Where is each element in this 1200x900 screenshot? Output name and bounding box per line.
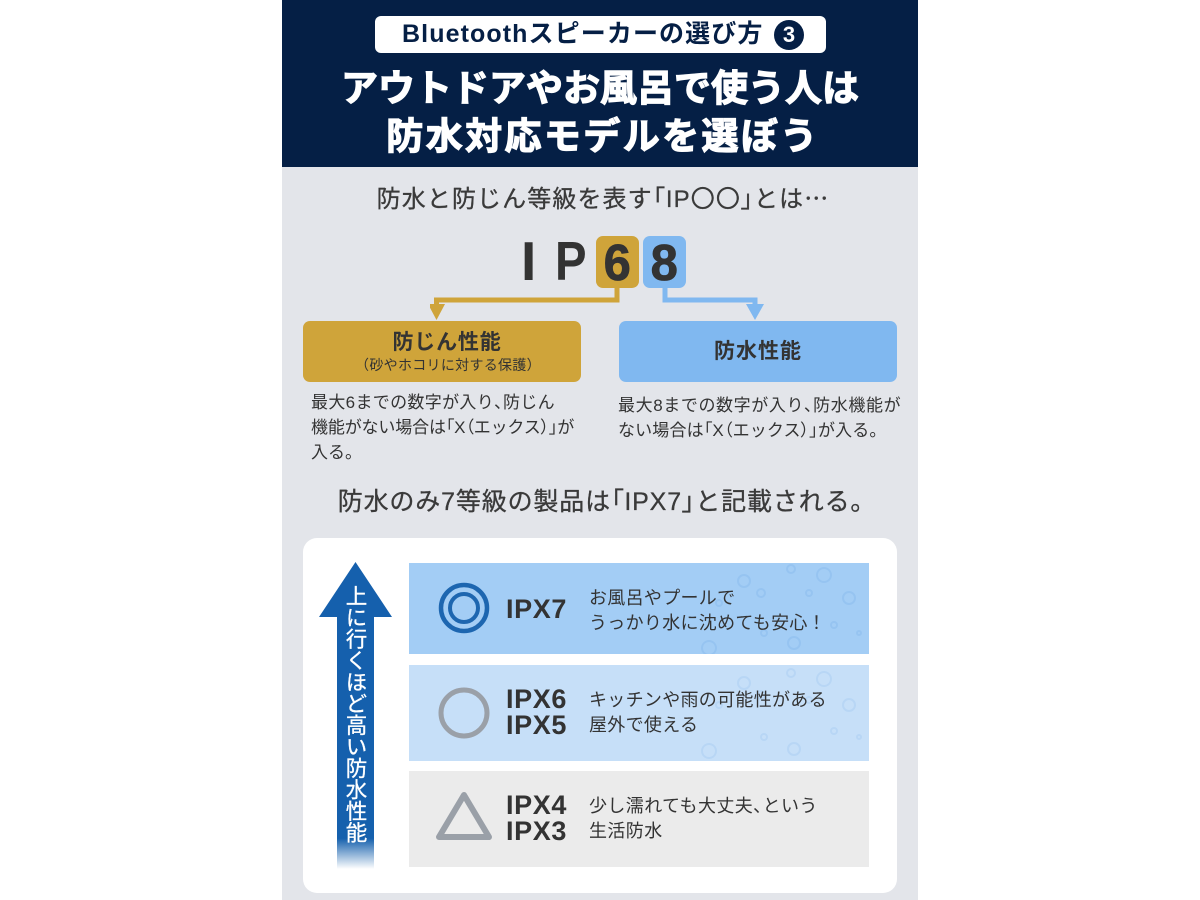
ratings IPX6 IPX5: IPX5	[506, 710, 567, 740]
page background panel	[282, 0, 918, 900]
ratings IPX6 IPX5	[506, 684, 567, 740]
note text: 防水のみ7等級の製品は「IPX7」と記載される。	[338, 488, 876, 516]
letter P: P	[555, 230, 587, 292]
water heading: 防水性能	[714, 340, 802, 363]
ratings IPX4 IPX3: IPX3	[506, 816, 567, 846]
row: IPX7	[409, 563, 869, 654]
title line 2: 防水対応モデルを選ぼう	[386, 116, 820, 157]
dust description: 最大6までの数字が入り、防じん	[311, 393, 555, 412]
IPX7 description: うっかり水に沈めても安心 ！	[589, 613, 821, 633]
arrow label: 上に行くほど高い防水性能	[343, 585, 367, 843]
section heading: 防水と防じん等級を表す「IP〇〇」とは…	[377, 179, 829, 214]
IPX6 IPX5 description: 屋外で使える	[589, 715, 698, 735]
water bubbles	[701, 564, 862, 654]
ratings IPX6 IPX5: IPX6	[506, 684, 567, 714]
digit 8 box: 8	[651, 234, 678, 291]
dust description: 入る。	[311, 443, 362, 462]
IPX4 IPX3 description: 少し濡れても大丈夫、という	[589, 796, 818, 816]
number badge 3	[774, 20, 804, 50]
IPX4 IPX3 description	[589, 796, 818, 841]
water bubbles	[701, 668, 862, 759]
digit 6 box	[596, 236, 639, 288]
arrow: higher is more waterproof	[319, 562, 392, 868]
panel: water resistance levels card	[303, 538, 897, 893]
ratings IPX4 IPX3	[506, 790, 567, 846]
icon: circle	[438, 688, 490, 738]
panel: water performance	[619, 321, 897, 382]
dust subheading: （砂やホコリに対する保護）	[355, 357, 541, 373]
IP68 diagram	[430, 230, 764, 320]
digit 6 box: 6	[604, 234, 631, 291]
dust description: 機能がない場合は「X（エックス）」が	[311, 418, 574, 437]
IPX7 description: お風呂やプールで	[589, 588, 735, 608]
connector arrows	[430, 288, 764, 320]
pill text: Bluetoothスピーカーの選び方	[402, 20, 763, 48]
letter I: I	[521, 230, 536, 292]
icon: double circle	[438, 582, 490, 634]
IPX4 IPX3 description: 生活防水	[589, 821, 663, 841]
dust description	[311, 393, 574, 462]
title line 1: アウトドアやお風呂で使う人は	[341, 68, 859, 109]
main title	[341, 68, 859, 157]
header pill label	[375, 16, 826, 53]
rating IPX7: IPX7	[506, 594, 567, 624]
dust heading: 防じん性能	[392, 331, 502, 354]
water description: ない場合は「X（エックス）」が入る。	[618, 421, 887, 440]
panel: dust performance	[303, 321, 581, 382]
water description	[618, 396, 901, 440]
row: IPX4 IPX3	[409, 771, 869, 867]
water description: 最大8までの数字が入り、防水機能が	[618, 396, 901, 415]
row: IPX6 IPX5	[409, 665, 869, 761]
digit 8 box	[643, 236, 686, 288]
header band	[282, 0, 918, 167]
ratings IPX4 IPX3: IPX4	[506, 790, 567, 820]
IPX6 IPX5 description: キッチンや雨の可能性がある	[589, 690, 827, 710]
IPX6 IPX5 description	[589, 690, 827, 735]
number badge 3: 3	[783, 22, 795, 47]
IPX7 description	[589, 588, 821, 633]
icon: triangle	[436, 792, 492, 840]
